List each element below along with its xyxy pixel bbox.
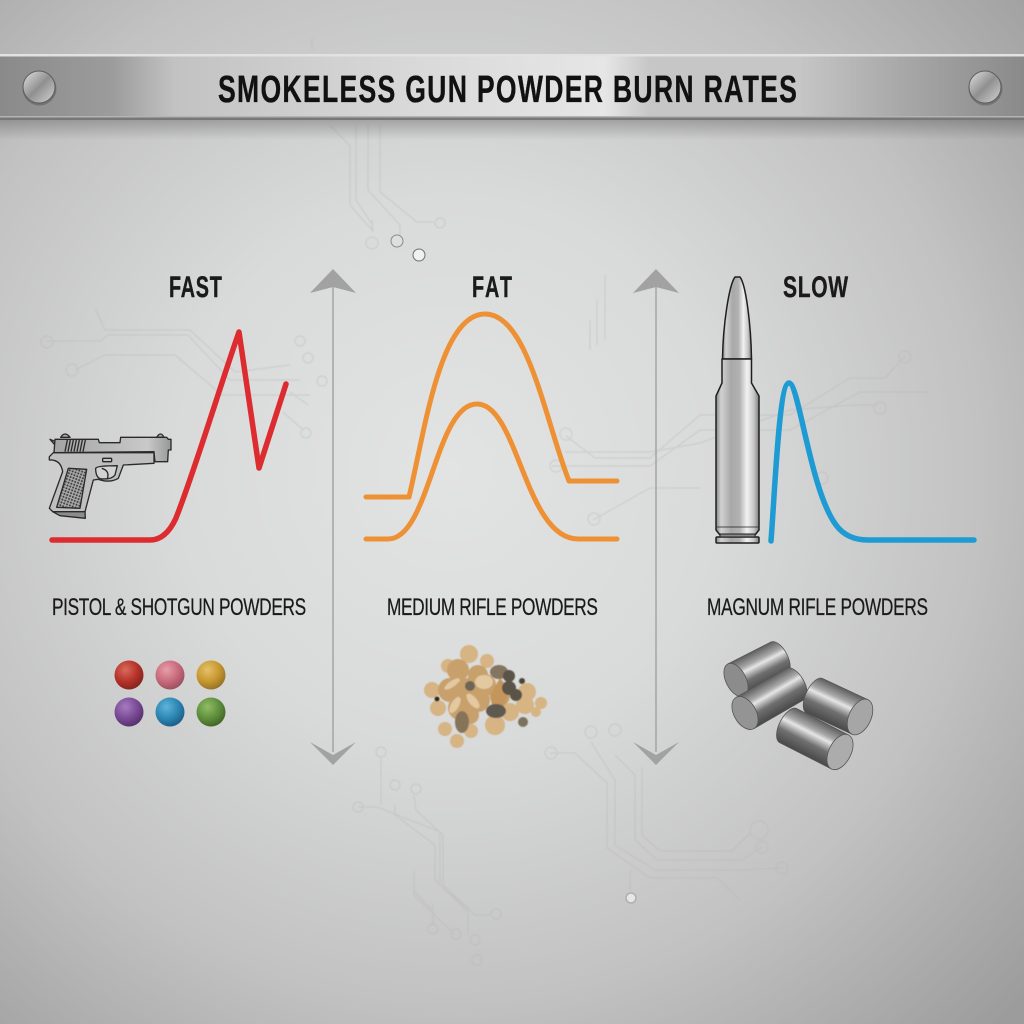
outer curve <box>366 314 617 497</box>
pellet 2 <box>726 664 812 734</box>
heading: fast: FAST <box>169 271 222 304</box>
icon: coloured ball powder <box>114 660 226 726</box>
pellet 3 <box>798 675 878 739</box>
title: SMOKELESS GUN POWDER BURN RATES <box>218 67 797 110</box>
right rivet <box>968 71 1002 106</box>
icon: pistol <box>49 434 171 518</box>
icon: rifle cartridge <box>716 277 759 543</box>
inner curve <box>366 404 617 539</box>
pellet 4 <box>772 705 858 774</box>
faint circuit traces <box>41 38 930 965</box>
silver droplets <box>391 235 636 903</box>
icon: cylindrical pellets <box>719 638 878 774</box>
title banner <box>0 54 1024 140</box>
label: medium rifle powders: MEDIUM RIFLE POWDERS <box>387 594 598 621</box>
slow burn curve <box>771 383 974 541</box>
right divider arrow <box>633 269 679 765</box>
label: magnum rifle powders: MAGNUM RIFLE POWDERS <box>707 594 928 621</box>
fast burn curve <box>52 332 286 540</box>
heading: fat: FAT <box>472 271 512 304</box>
left divider arrow <box>310 269 356 765</box>
label: pistol and shotgun powders: PISTOL & SHOTGUN POWDERS <box>52 594 306 621</box>
left rivet <box>22 71 56 106</box>
heading: slow: SLOW <box>783 272 849 304</box>
pellet 1 <box>719 638 795 701</box>
medium burn curves <box>366 314 617 539</box>
icon: flake powder <box>424 645 547 748</box>
